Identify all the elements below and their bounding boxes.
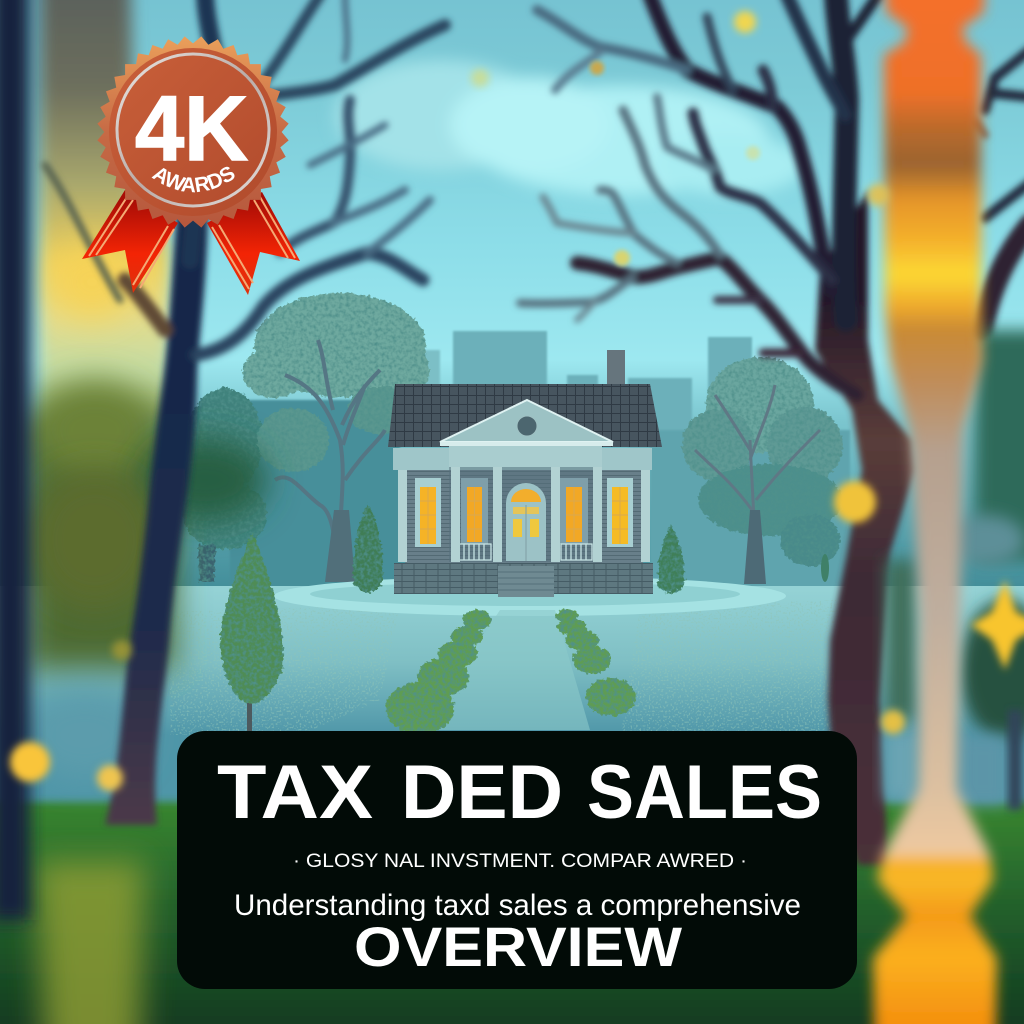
badge text: AWARDS: AWARDS (152, 166, 234, 192)
balustrade left (459, 544, 491, 560)
title: TAX (217, 750, 373, 835)
cypress tree: foreground (220, 532, 283, 732)
foreground tree: left (45, 0, 445, 825)
blurred pillar: orange and cream (873, 0, 997, 1024)
porch recess (449, 467, 602, 562)
seal burst (98, 36, 289, 228)
icon: gold star (971, 580, 1024, 670)
grass: foreground (0, 802, 1024, 1024)
columns (398, 467, 650, 562)
shrub: left of house (353, 503, 383, 592)
seal disk (109, 48, 277, 216)
midground trees: dark background left (183, 388, 267, 582)
badge text: 4K: 4K (135, 78, 248, 180)
silver ring (117, 54, 269, 206)
glow: yellow left (50, 244, 134, 320)
porch entablature (449, 445, 602, 467)
shrub: right of house (658, 524, 684, 593)
garden path (420, 610, 590, 730)
hedges: left of path (386, 610, 491, 734)
hedges: right of path (556, 609, 636, 716)
distant city skyline (230, 331, 850, 590)
overview heading: OVERVIEW (354, 915, 682, 978)
ribbon left (82, 190, 178, 293)
front steps (498, 566, 554, 597)
olive glow on grass, left (35, 860, 145, 1024)
title: SALES (587, 750, 822, 835)
title panel (177, 731, 857, 989)
window 3 (560, 478, 588, 544)
foreground tree: right (520, 0, 915, 865)
glowing lights (10, 11, 905, 791)
branches right of pillar (975, 50, 1024, 330)
award badge (82, 36, 300, 295)
foliage: blurred right (885, 330, 1024, 810)
window 1 (415, 478, 441, 547)
stone foundation (394, 563, 653, 594)
side entablature (393, 448, 652, 470)
title: DED (401, 750, 563, 835)
lawn speckles (170, 600, 840, 735)
clouds (335, 60, 805, 195)
title (217, 750, 822, 835)
trunk: dark far left (0, 0, 30, 920)
subtitle: · GLOSY NAL INVSTMENT. COMPAR AWRED · (293, 850, 747, 872)
foliage: blurred left (25, 380, 267, 780)
midground tree: right (682, 357, 843, 584)
roof (388, 384, 662, 447)
house (388, 350, 662, 597)
front door (506, 483, 546, 561)
circular drive around house (274, 576, 786, 616)
ribbon right (207, 192, 300, 295)
balustrade right (561, 544, 592, 560)
lawn (0, 586, 1024, 806)
small shrub far right (821, 554, 829, 582)
window 4 (607, 478, 633, 547)
midground tree: left (243, 293, 429, 582)
blurred column: left (40, 0, 170, 440)
pediment (440, 400, 613, 446)
window 2 (461, 478, 488, 544)
chimney (607, 350, 625, 392)
brick wall (405, 470, 643, 563)
description: Understanding taxd sales a comprehensive (234, 889, 801, 922)
